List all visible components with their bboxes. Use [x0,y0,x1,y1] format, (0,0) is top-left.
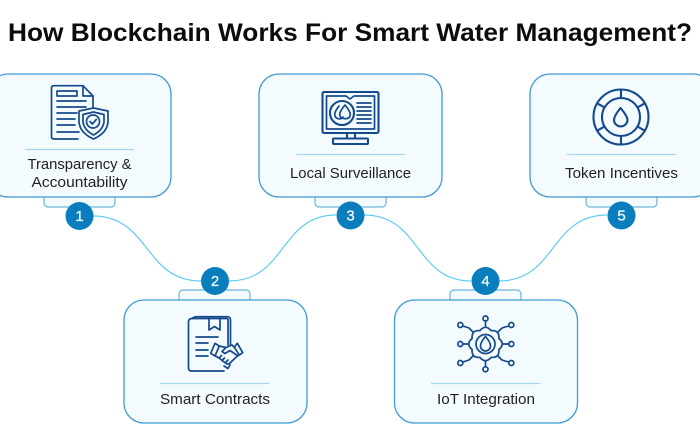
label 5: Token Incentives [565,165,678,182]
divider 1 [25,148,134,150]
tab 1 [44,187,115,207]
icon: document with shield [52,86,108,139]
label 2: Smart Contracts [160,391,270,408]
step badge 4: 4 [481,273,490,290]
panel: smart contracts [124,290,307,423]
step badge 4 [472,267,500,295]
step badge 5: 5 [617,208,626,224]
step badge 3: 3 [346,208,355,224]
card 5 [530,74,700,197]
tab 4 [450,290,521,310]
tab 3 [315,187,386,207]
panel: iot integration [394,290,578,423]
label 1: Transparency & [28,156,132,173]
step badge 2: 2 [211,273,219,290]
divider 2 [160,382,269,384]
icon: token with drop [594,90,648,144]
tab 2 [179,290,250,310]
divider 4 [431,382,540,384]
panel: transparency and accountability [0,74,171,207]
divider 5 [567,154,676,156]
step badge 1 [66,202,94,230]
tab 5 [586,187,657,207]
icon: monitor with water drops [322,92,378,144]
connector wave [93,215,607,281]
step badge 5 [608,202,636,230]
icon: contract with handshake [188,317,243,371]
panel: local surveillance [259,74,442,207]
panel: token incentives [530,74,700,207]
step badge 2 [201,267,229,295]
label 4: IoT Integration [437,391,535,408]
card 4 [394,300,578,423]
card 2 [124,300,307,423]
divider 3 [296,154,405,156]
card 1 [0,74,171,197]
label 1 line 2: Accountability [32,174,128,191]
step badge 1: 1 [75,208,84,225]
title: How Blockchain Works For Smart Water Management? [8,19,692,47]
icon: gear with nodes [458,316,514,372]
label 3: Local Surveillance [290,165,411,182]
step badge 3 [336,202,364,230]
card 3 [259,74,442,197]
